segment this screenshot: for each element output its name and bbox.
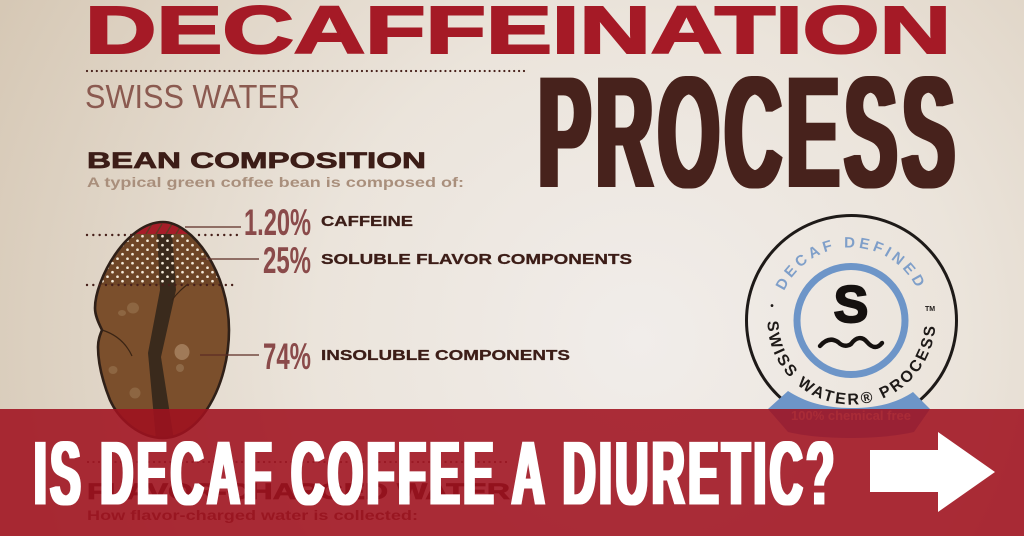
stat: insoluble components: 74% (263, 336, 311, 377)
heading: bean composition (87, 148, 464, 190)
banner (0, 409, 1024, 536)
subtitle: swiss water: SWISS WATER (85, 78, 300, 115)
stat: insoluble components (263, 336, 570, 377)
title: process: PROCESS (538, 43, 955, 221)
stat: insoluble components: INSOLUBLE COMPONENTS (321, 347, 570, 364)
faint section: flavor-charged water: How flavor-charged water is collected: (87, 508, 418, 523)
faint section: flavor-charged water: FLAVOR-CHARGED WATER (87, 479, 510, 504)
stat: caffeine: 1.20% (244, 202, 311, 243)
stat: caffeine (244, 202, 413, 243)
badge: decaf defined swiss water process: S (834, 276, 868, 334)
badge: decaf defined swiss water process: TM (925, 306, 935, 313)
stat: soluble flavor components: SOLUBLE FLAVOR COMPONENTS (321, 251, 632, 268)
badge: decaf defined swiss water process: • (770, 301, 774, 312)
stat: soluble flavor components (263, 240, 632, 281)
badge: decaf defined swiss water process: SWISS WATER® PROCESS (768, 322, 935, 405)
arrow (870, 432, 995, 512)
faint section: flavor-charged water (87, 462, 510, 523)
badge: decaf defined swiss water process: DECAF DEFINED (776, 237, 924, 290)
banner headline: IS DECAF COFFEE A DIURETIC? (34, 424, 834, 525)
badge: decaf defined swiss water process: 100% chemical free (791, 408, 911, 423)
stat: soluble flavor components: 25% (263, 240, 311, 281)
stat: caffeine: CAFFEINE (321, 213, 413, 230)
icon: coffee bean diagram (87, 218, 259, 443)
badge: decaf defined swiss water process (745, 214, 958, 438)
heading: bean composition: A typical green coffee bean is composed of: (87, 175, 464, 190)
heading: bean composition: BEAN COMPOSITION (87, 148, 426, 173)
